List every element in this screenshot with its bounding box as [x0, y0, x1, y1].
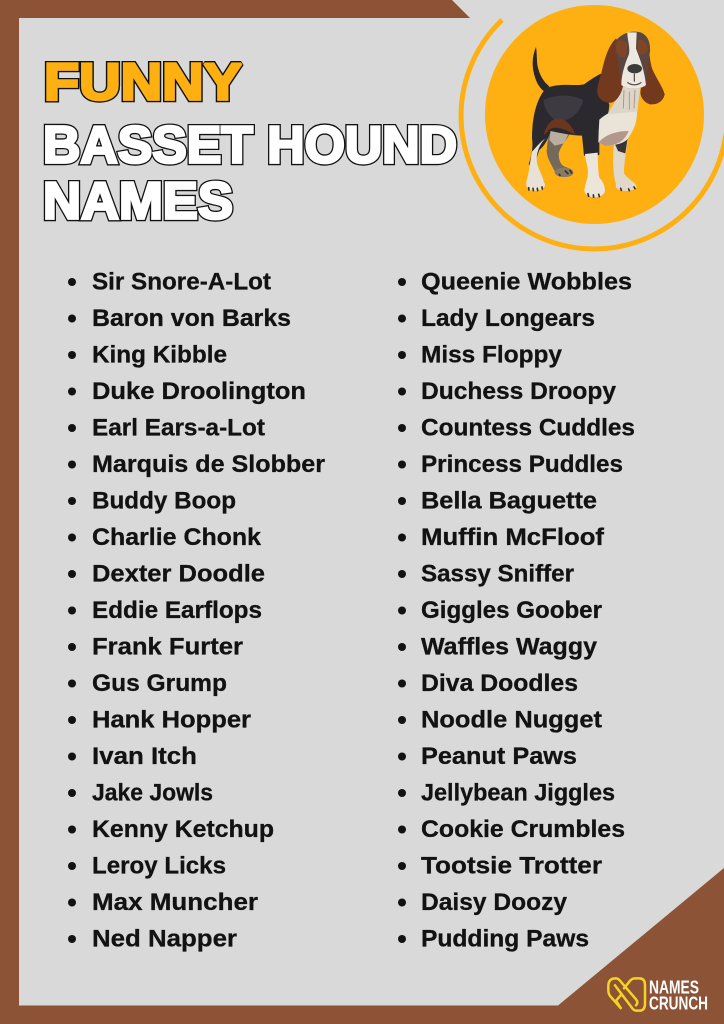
near rear leg	[526, 138, 545, 190]
names list: left column	[68, 268, 325, 952]
rear thigh	[544, 118, 575, 135]
names list: right column: Waffles Waggy	[421, 633, 597, 660]
logo: Names Crunch	[608, 978, 708, 1014]
nose	[627, 64, 642, 73]
head	[615, 32, 650, 89]
title line: BASSET HOUND: BASSET HOUND	[43, 116, 457, 174]
names list: left column: King Kibble	[92, 341, 227, 368]
title line: NAMES: NAMES	[43, 172, 233, 230]
names list: right column	[398, 268, 635, 952]
names list: left column: Dexter Doodle	[92, 560, 265, 587]
names list: left column: Buddy Boop	[92, 487, 236, 514]
names list: right column: Cookie Crumbles	[421, 816, 625, 843]
names list: left column: Duke Droolington	[92, 378, 306, 405]
names list: right column: Peanut Paws	[421, 743, 577, 770]
icon: basset hound	[526, 32, 665, 197]
names list: left column: Max Muncher	[92, 889, 258, 916]
names list: right column: Giggles Goober	[421, 597, 602, 624]
names list: left column: Baron von Barks	[92, 305, 291, 332]
names list: left column: Sir Snore-A-Lot	[92, 268, 271, 295]
names list: left column: Jake Jowls	[92, 779, 213, 806]
names list: right column: Lady Longears	[421, 305, 595, 332]
chest	[598, 107, 637, 145]
body	[529, 74, 609, 165]
names list: right column: Miss Floppy	[421, 341, 562, 368]
names list: left column: Earl Ears-a-Lot	[92, 414, 265, 441]
logo wordmark: NAMES: NAMES	[649, 978, 699, 998]
title	[43, 54, 457, 230]
far front leg	[613, 132, 637, 190]
yellow circle	[485, 5, 704, 224]
names list: left column: Ivan Itch	[92, 743, 197, 770]
names list: right column: Duchess Droopy	[421, 378, 616, 405]
far rear leg	[547, 132, 573, 177]
names list: right column: Diva Doodles	[421, 670, 578, 697]
title line: FUNNY: FUNNY	[44, 54, 242, 112]
names list: left column: Hank Hopper	[92, 706, 251, 733]
names list: right column: Queenie Wobbles	[421, 268, 632, 295]
names list: left column: Frank Furter	[92, 633, 243, 660]
names list: right column: Noodle Nugget	[421, 706, 602, 733]
eye patches	[616, 40, 648, 57]
left ear	[597, 38, 624, 103]
names list: right column: Princess Puddles	[421, 451, 623, 478]
names list: left column: Charlie Chonk	[92, 524, 261, 551]
neck	[607, 83, 641, 114]
yellow ring	[461, 20, 724, 249]
icon: N mark	[608, 978, 645, 1011]
names list: right column: Countess Cuddles	[421, 414, 635, 441]
blaze and muzzle	[621, 32, 646, 89]
tail	[533, 47, 549, 92]
names list: right column: Tootsie Trotter	[421, 852, 602, 879]
title line: FUNNY: FUNNY	[44, 54, 242, 112]
names list: left column: Eddie Earflops	[92, 597, 262, 624]
names list: right column: Jellybean Jiggles	[421, 779, 615, 806]
dog badge	[461, 5, 724, 249]
paws	[529, 170, 635, 197]
right ear	[640, 40, 665, 104]
names list: left column: Kenny Ketchup	[92, 816, 274, 843]
names list: left column: Gus Grump	[92, 670, 227, 697]
names list: left column: Marquis de Slobber	[92, 451, 325, 478]
names list: right column: Daisy Doozy	[421, 889, 567, 916]
title line: NAMES: NAMES	[43, 172, 233, 230]
names list: left column: Leroy Licks	[92, 852, 226, 879]
names list: right column: Muffin McFloof	[421, 524, 605, 551]
names list: right column: Pudding Paws	[421, 925, 589, 952]
title line: BASSET HOUND: BASSET HOUND	[43, 116, 457, 174]
near front leg	[585, 153, 605, 197]
names list: right column: Sassy Sniffer	[421, 560, 574, 587]
names list: right column: Bella Baguette	[421, 487, 597, 514]
names list: left column: Ned Napper	[92, 925, 237, 952]
